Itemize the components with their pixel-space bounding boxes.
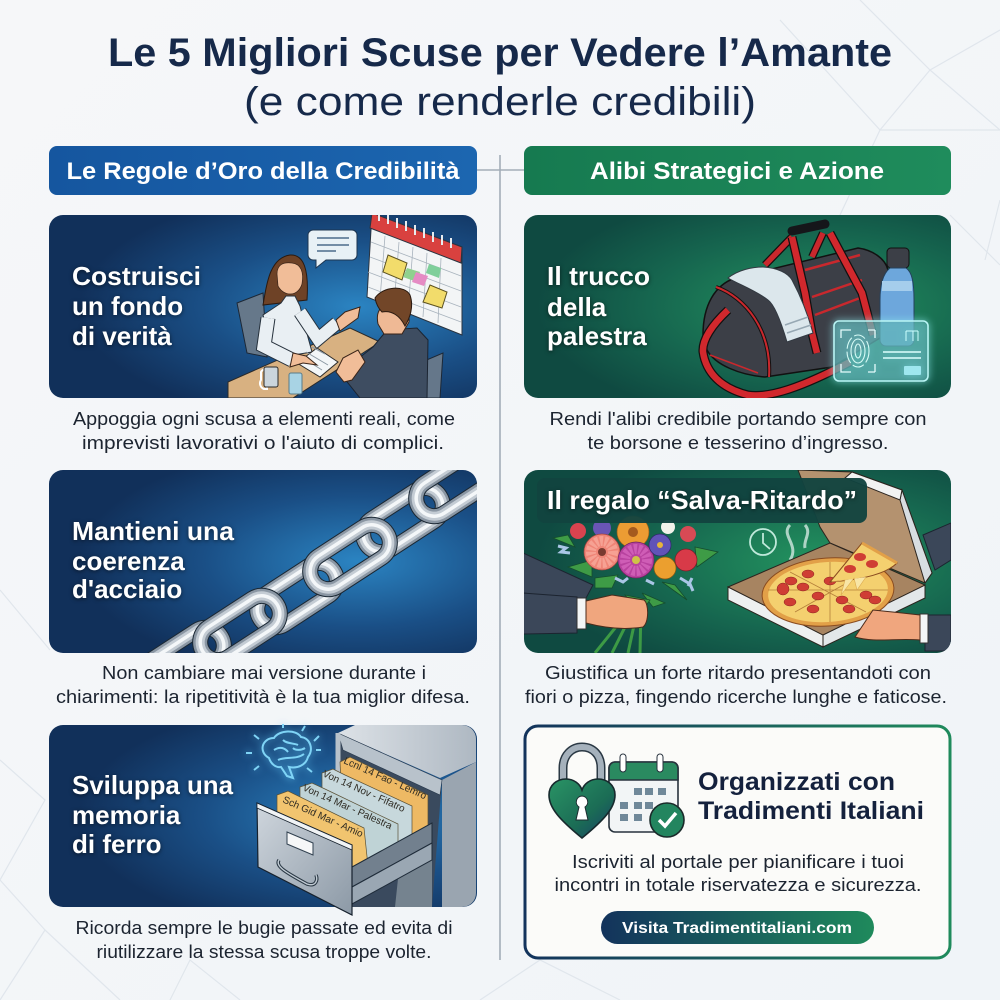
panel title: Il trucco della palestra: Il trucco (547, 261, 650, 291)
panel: regalo salva-ritardo (523, 470, 951, 653)
bouquet (553, 516, 718, 653)
icon: glowing brain (246, 724, 321, 778)
cta button (601, 911, 874, 944)
panel title: Il regalo "Salva-Ritardo": Il regalo “Salva-Ritardo” (547, 485, 857, 515)
icon: clock (750, 529, 776, 555)
folder labels: Von 14 Mar - Palestra (301, 783, 394, 832)
title: (e come renderle credibili) (244, 80, 756, 124)
cta button: Visita Tradimentitaliani.com (622, 920, 852, 937)
cta heading: Tradimenti Italiani (698, 797, 924, 825)
folder labels: Sch Gid Mar - Amio (281, 795, 365, 840)
panel: fondo di verità (49, 212, 477, 398)
panel title: Il trucco della palestra: palestra (547, 321, 647, 351)
illustration: meeting at desk (228, 212, 462, 398)
illustration: steel chain (148, 470, 477, 653)
panel: trucco della palestra (524, 215, 951, 398)
panel title: Costruisci un fondo di verità: Costruisci (72, 261, 201, 291)
title: Le 5 Migliori Scuse per Vedere l’Amante (108, 31, 892, 75)
heading: left column (49, 146, 477, 195)
panel title: Il trucco della palestra: della (547, 292, 607, 322)
cta heading: Organizzati con (698, 768, 895, 796)
caption: coerenza d'acciaio: Non cambiare mai versione durante i (102, 663, 426, 683)
panel title: Sviluppa una memoria di ferro: memoria (72, 800, 181, 830)
caption: fondo di verità: imprevisti lavorativi o l'aiuto di complici. (82, 433, 444, 453)
panel title: Sviluppa una memoria di ferro: di ferro (72, 829, 162, 859)
heading: right column: Alibi Strategici e Azione (590, 158, 884, 185)
illustration: filing cabinet (246, 724, 476, 915)
panel: memoria di ferro (49, 724, 477, 915)
panel title: Il regalo "Salva-Ritardo" (537, 478, 867, 523)
panel: coerenza d'acciaio (49, 470, 477, 653)
panel: call to action (525, 726, 950, 958)
caption: memoria di ferro: Ricorda sempre le bugie passate ed evita di (76, 918, 452, 938)
pizza box (728, 470, 932, 647)
icon: heart padlock and calendar (549, 747, 684, 838)
panel title: Sviluppa una memoria di ferro: Sviluppa una (72, 770, 234, 800)
drawer front (257, 803, 352, 915)
cta text: incontri in totale riservatezza e sicurezza. (554, 875, 922, 895)
folder labels (281, 756, 428, 840)
cta text (554, 852, 922, 895)
caption: trucco della palestra: te borsone e tesserino d’ingresso. (588, 433, 888, 453)
panel title: Costruisci un fondo di verità: di verità (72, 321, 172, 351)
caption: regalo salva-ritardo: Giustifica un forte ritardo presentandoti con (545, 663, 931, 683)
folders (277, 757, 428, 880)
hand holding box (855, 610, 920, 640)
folder labels: Lcnl 14 Fao - Lemro (342, 756, 428, 802)
caption: coerenza d'acciaio (56, 663, 470, 707)
caption: trucco della palestra: Rendi l'alibi credibile portando sempre con (550, 409, 926, 429)
panel title: Mantieni una coerenza d'acciaio: coerenza (72, 546, 185, 576)
caption: memoria di ferro: riutilizzare la stessa scusa troppe volte. (96, 942, 432, 962)
heading: left column: Le Regole d’Oro della Credibilità (66, 158, 460, 185)
steam (786, 524, 810, 560)
cta heading (698, 768, 924, 825)
caption: regalo salva-ritardo (525, 663, 947, 707)
caption: fondo di verità (73, 409, 455, 453)
illustration: flowers and pizza (523, 470, 951, 653)
caption: memoria di ferro (76, 918, 452, 962)
icon: speech bubble (308, 230, 357, 268)
panel title: Mantieni una coerenza d'acciaio: d'acciaio (72, 574, 182, 604)
cta text: Iscriviti al portale per pianificare i tuoi (572, 852, 904, 872)
caption: fondo di verità: Appoggia ogni scusa a elementi reali, come (73, 409, 455, 429)
icon: glowing access card (834, 321, 928, 381)
illustration: gym bag (703, 224, 928, 396)
hands and sleeves (523, 523, 951, 651)
caption: trucco della palestra (550, 409, 926, 453)
panel title: Mantieni una coerenza d'acciaio: Mantieni una (72, 516, 235, 546)
caption: regalo salva-ritardo: fiori o pizza, fingendo ricerche lunghe e faticose. (525, 687, 947, 707)
caption: coerenza d'acciaio: chiarimenti: la ripetitività è la tua miglior difesa. (56, 687, 470, 707)
heading: right column (524, 146, 951, 195)
panel title: Costruisci un fondo di verità: un fondo (72, 291, 183, 321)
folder labels: Von 14 Nov - Fifatro (321, 769, 407, 815)
title (108, 31, 892, 124)
